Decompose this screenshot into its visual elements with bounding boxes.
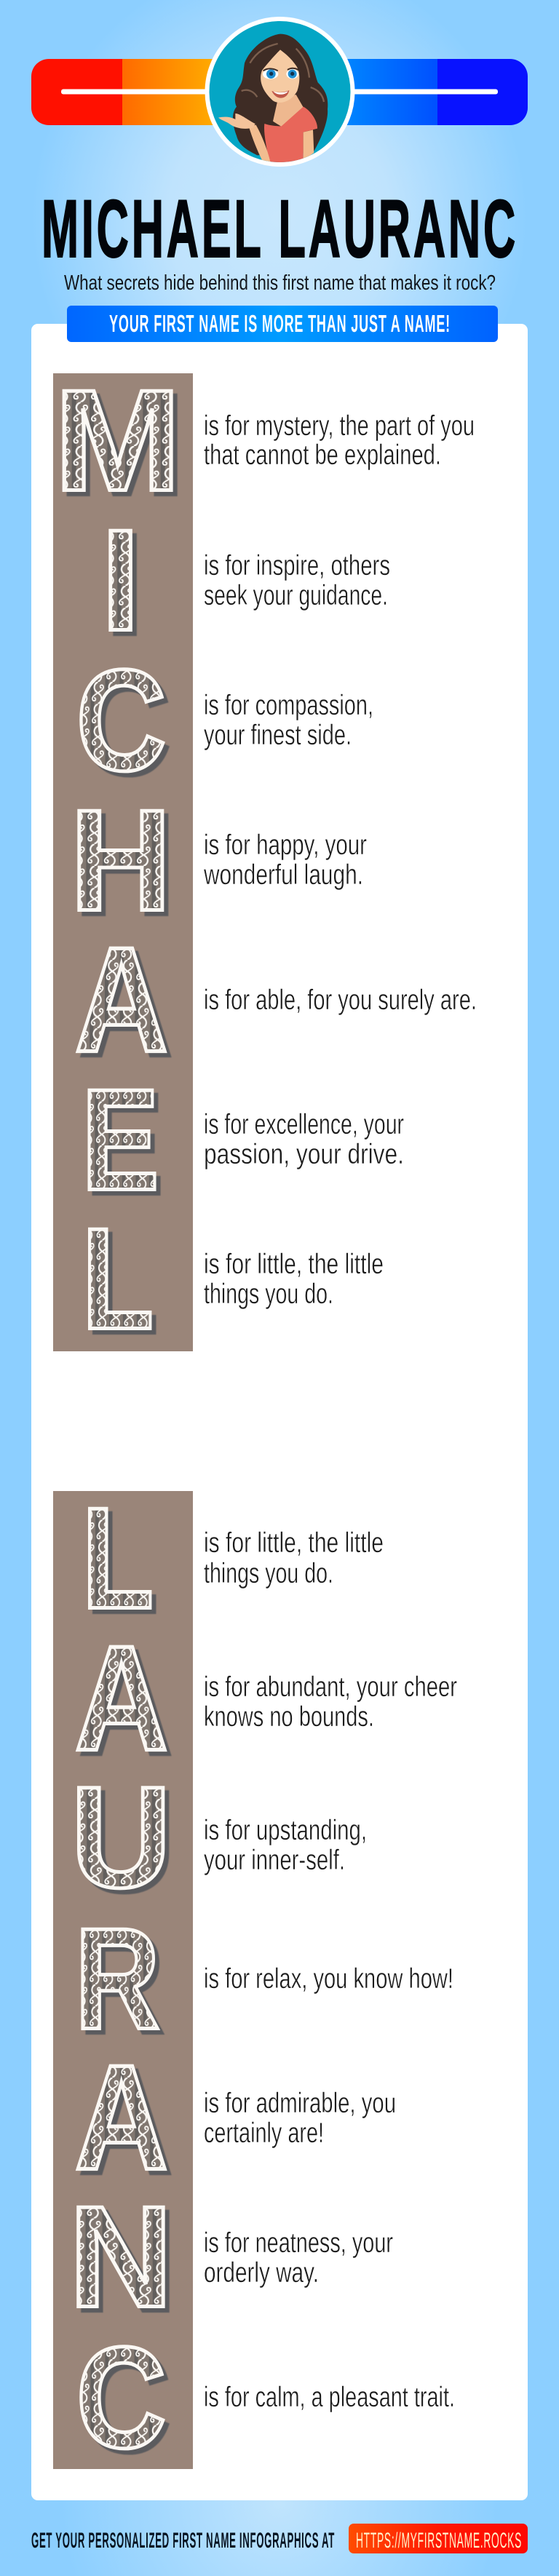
column: MICHAEL letters: I — [101, 500, 140, 661]
column: MICHAEL letters: M — [54, 360, 181, 521]
text: LAURANC descriptions: is for little, the little — [204, 1527, 384, 1559]
text: MICHAEL descriptions: things you do. — [204, 1279, 333, 1310]
text: MICHAEL descriptions: wonderful laugh. — [203, 859, 363, 891]
column: LAURANC letters: N — [68, 2176, 173, 2337]
text: LAURANC descriptions: certainly are! — [204, 2118, 324, 2149]
avatar: cartoon woman in circle — [207, 19, 352, 164]
text: MICHAEL descriptions: is for happy, your — [204, 830, 367, 861]
text: MICHAEL descriptions: is for able, for you surely are. — [204, 985, 477, 1016]
column: LAURANC letters: L — [82, 1478, 154, 1639]
text: LAURANC descriptions: knows no bounds. — [204, 1701, 374, 1733]
column: LAURANC letters: A — [74, 1615, 168, 1781]
text: LAURANC descriptions: is for abundant, your cheer — [204, 1671, 457, 1703]
text: LAURANC descriptions: is for calm, a pleasant trait. — [204, 2382, 455, 2413]
text: LAURANC descriptions: is for upstanding, — [204, 1815, 367, 1846]
column: MICHAEL letters — [53, 360, 193, 1359]
text: LAURANC descriptions: is for relax, you know how! — [204, 1963, 453, 1995]
column: LAURANC letters: A — [74, 2034, 168, 2201]
text: LAURANC descriptions: your inner-self. — [204, 1845, 345, 1876]
column: LAURANC letters: R — [75, 1899, 160, 2059]
header ribbon bar — [31, 59, 528, 125]
panel: last name LAURANC — [53, 1478, 457, 2478]
text: MICHAEL descriptions: your finest side. — [204, 720, 352, 751]
text: MICHAEL descriptions: seek your guidance. — [204, 580, 388, 611]
column: MICHAEL letters: H — [70, 780, 172, 941]
column: MICHAEL letters: E — [82, 1060, 159, 1220]
column: LAURANC letters: C — [76, 2318, 167, 2478]
panel: first name MICHAEL — [53, 360, 477, 1359]
column: MICHAEL letters: A — [74, 916, 168, 1083]
text: MICHAEL descriptions: is for little, the little — [204, 1249, 384, 1280]
text: LAURANC descriptions: is for neatness, your — [204, 2227, 393, 2259]
text: MICHAEL descriptions — [203, 410, 477, 1310]
text: MICHAEL descriptions: is for excellence, your — [204, 1109, 404, 1140]
column: MICHAEL letters: C — [76, 640, 167, 801]
column: LAURANC letters — [53, 1478, 193, 2478]
text: LAURANC descriptions — [204, 1527, 457, 2413]
banner — [67, 306, 498, 342]
text: MICHAEL descriptions: passion, your drive. — [204, 1139, 404, 1170]
column: LAURANC letters: U — [71, 1757, 172, 1918]
column: MICHAEL letters: L — [82, 1198, 154, 1359]
text: LAURANC descriptions: orderly way. — [204, 2257, 319, 2289]
text: MICHAEL descriptions: that cannot be explained. — [204, 440, 441, 471]
text: MICHAEL descriptions: is for mystery, the part of you — [204, 410, 475, 442]
text: LAURANC descriptions: things you do. — [204, 1558, 333, 1589]
footer url button — [349, 2524, 528, 2553]
text: MICHAEL descriptions: is for compassion, — [204, 690, 373, 721]
white content panel — [31, 324, 528, 2500]
text: LAURANC descriptions: is for admirable, you — [204, 2088, 396, 2119]
text: MICHAEL descriptions: is for inspire, others — [204, 550, 390, 581]
